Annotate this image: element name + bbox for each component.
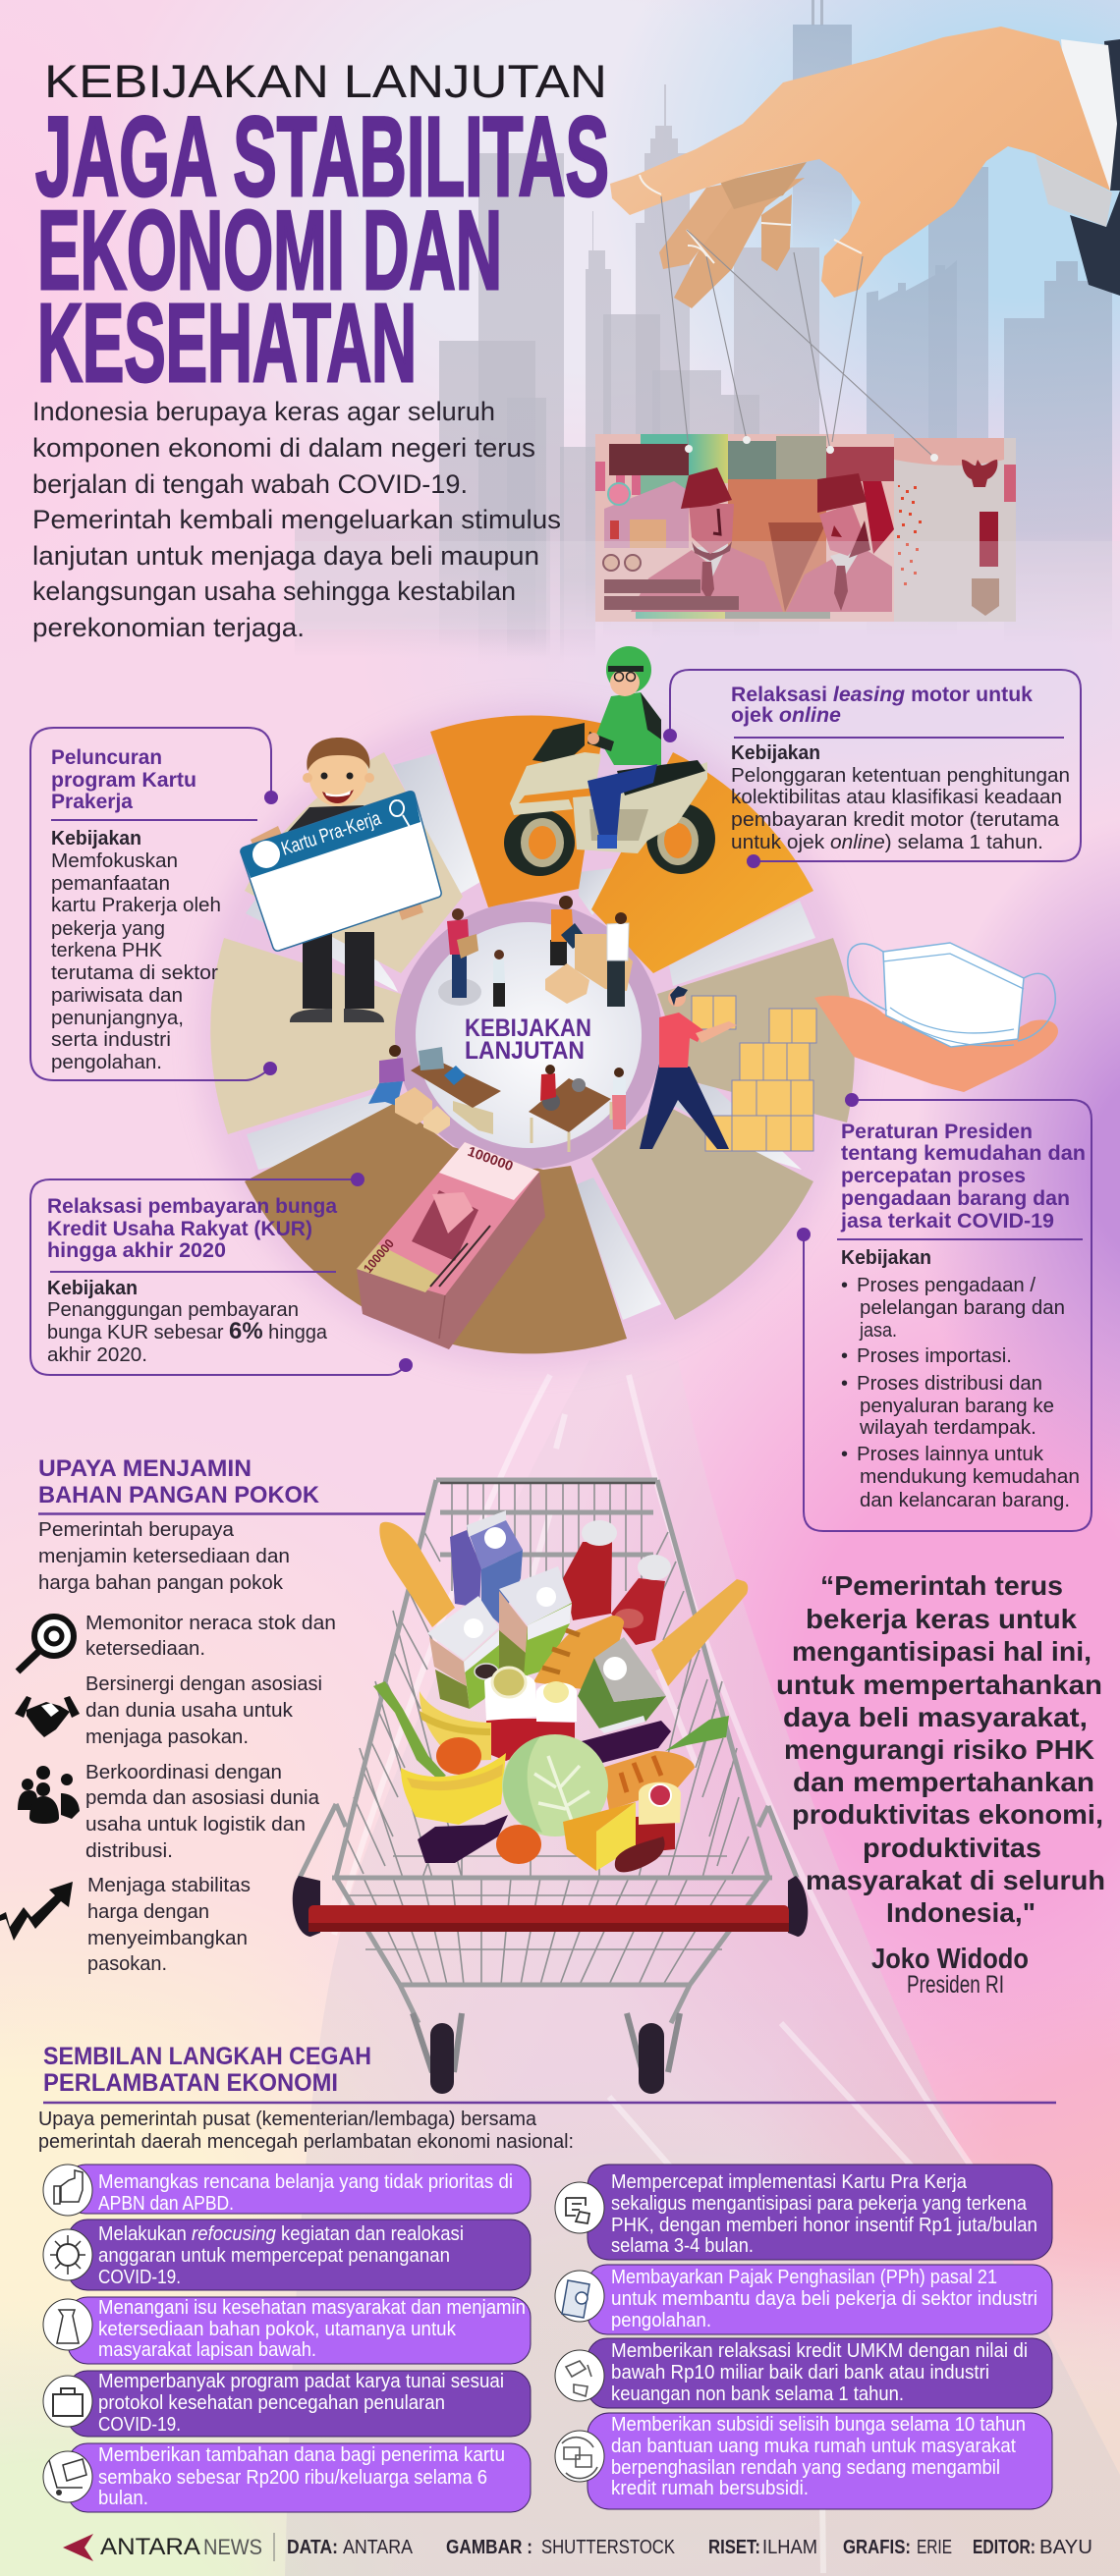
eggplant right <box>582 1721 671 1763</box>
callout: Kartu Prakerja: terkena PHK <box>51 940 163 961</box>
center label: KEBIJAKAN <box>465 1014 591 1042</box>
credits: RISET: <box>708 2537 760 2558</box>
cheese <box>563 1802 636 1871</box>
callout: leasing motor: Relaksasi leasing motor untuk <box>731 684 1033 706</box>
callout: Peraturan Presiden: Proses distribusi dan <box>857 1373 1042 1395</box>
callout: leasing motor: kolektibilitas atau klasifikasi keadaan <box>731 787 1062 808</box>
heading: UPAYA MENJAMIN <box>38 1455 252 1482</box>
credits: GRAFIS: <box>843 2537 911 2558</box>
front shield <box>510 752 601 815</box>
intro paragraph <box>32 397 561 642</box>
step 6 <box>555 2165 1052 2260</box>
baguette right <box>651 1579 748 1686</box>
intro text: harga bahan pangan pokok <box>38 1572 284 1594</box>
callout: KUR: hingga akhir 2020 <box>47 1239 226 1262</box>
heading: SEMBILAN LANGKAH CEGAH <box>43 2043 371 2070</box>
body and cowl <box>573 762 707 853</box>
intro paragraph: perekonomian terjaga. <box>32 613 305 642</box>
callout: Kartu Prakerja: pekerja yang <box>51 918 165 940</box>
callout: KUR <box>30 1173 413 1375</box>
callout: Kartu Prakerja: penunjangnya, <box>51 1008 184 1029</box>
rider legs <box>588 764 657 837</box>
wedge: man <box>245 752 463 973</box>
rings <box>640 175 862 263</box>
heading <box>43 2043 371 2097</box>
section: bahan pangan pokok <box>0 1455 425 1975</box>
item: asosiasi <box>85 1673 322 1748</box>
ketchup bottles <box>563 1542 612 1620</box>
step 7 <box>555 2265 1052 2334</box>
center label <box>465 1014 591 1065</box>
front wheel <box>504 809 575 876</box>
step 9: berpenghasilan rendah yang sedang mengambil <box>611 2457 1000 2479</box>
step 8: bawah Rp10 miliar baik dari bank atau industri <box>611 2362 989 2384</box>
step 7: Membayarkan Pajak Penghasilan (PPh) pasal 21 <box>611 2267 997 2288</box>
step 9: dan bantuan uang muka rumah untuk masyarakat <box>611 2436 1016 2457</box>
step 7: untuk membantu daya beli pekerja di sektor industri <box>611 2288 1037 2310</box>
helmet <box>606 646 651 693</box>
note value top: 100000 <box>466 1143 516 1174</box>
wedge: orange left <box>430 715 604 907</box>
callout: Kartu Prakerja: pariwisata dan <box>51 985 183 1007</box>
quote: daya beli masyarakat, <box>783 1702 1088 1732</box>
quote: produktivitas <box>863 1833 1041 1863</box>
quote: “Pemerintah terus <box>820 1570 1063 1601</box>
step 8: keuangan non bank selama 1 tahun. <box>611 2384 904 2405</box>
step 9 <box>555 2413 1052 2509</box>
item: stabilitas: Menjaga stabilitas <box>87 1875 251 1896</box>
callout: Kartu Prakerja: Prakerja <box>51 791 133 813</box>
callout: Peraturan Presiden: • <box>841 1444 848 1465</box>
step 2 <box>43 2220 531 2290</box>
callout: KUR: Penanggungan pembayaran <box>47 1299 299 1321</box>
callout: Kartu Prakerja: Kebijakan <box>51 828 141 850</box>
wedge: left <box>210 938 401 1134</box>
callout: Peraturan Presiden: • <box>841 1373 848 1395</box>
section: sembilan langkah <box>38 2043 1056 2512</box>
intro text <box>38 2109 574 2153</box>
tomato lower <box>496 1825 541 1864</box>
step 6: PHK, dengan memberi honor insentif Rp1 juta/bulan <box>611 2215 1037 2236</box>
callout: Kartu Prakerja: kartu Prakerja oleh <box>51 895 221 916</box>
card header <box>241 792 420 878</box>
item: asosiasi: menjaga pasokan. <box>85 1726 249 1748</box>
title: EKONOMI DAN <box>37 189 502 313</box>
credits: GAMBAR : <box>446 2537 532 2558</box>
callout: leasing motor: pembayaran kredit motor (terutama <box>731 809 1060 831</box>
callout: Peraturan Presiden: dan kelancaran barang. <box>860 1490 1070 1511</box>
suit sleeve <box>1070 39 1120 296</box>
quote: produktivitas ekonomi, <box>792 1799 1103 1830</box>
quote: Indonesia," <box>886 1897 1036 1928</box>
quote: masyarakat di seluruh <box>806 1865 1105 1895</box>
intro paragraph: berjalan di tengah wabah COVID-19. <box>32 469 468 499</box>
icon: magnifier <box>18 1617 74 1672</box>
credits: SHUTTERSTOCK <box>541 2537 676 2558</box>
card label: Kartu Pra-Kerja <box>279 807 384 860</box>
cart wheels <box>413 2013 680 2094</box>
carton left <box>429 1637 467 1686</box>
step 1: Memangkas rencana belanja yang tidak prioritas di <box>98 2171 513 2193</box>
step 6: sekaligus mengantisipasi para pekerja yang terkena <box>611 2193 1028 2215</box>
step 4: protokol kesehatan pencegahan penularan <box>98 2392 445 2414</box>
heading <box>38 1455 320 1508</box>
item: stabilitas <box>87 1875 251 1975</box>
banknote <box>295 434 1120 630</box>
step 4 <box>43 2371 531 2437</box>
callout: KUR: akhir 2020. <box>47 1344 147 1366</box>
policy wheel <box>197 704 862 1368</box>
callout: Peraturan Presiden: • <box>841 1345 848 1367</box>
step 4: COVID-19. <box>98 2414 181 2436</box>
shopping cart <box>293 1480 808 2094</box>
center scene: people and boxes <box>368 896 633 1152</box>
center ring <box>395 902 662 1169</box>
item: koordinasi: distribusi. <box>85 1840 173 1862</box>
step 5 <box>43 2443 531 2512</box>
hand <box>610 27 1110 298</box>
quote: Joko Widodo <box>871 1944 1029 1975</box>
logo: NEWS <box>203 2535 262 2559</box>
green box <box>578 1658 666 1728</box>
callout: KUR: Kebijakan <box>47 1278 138 1299</box>
intro paragraph: komponen ekonomi di dalam negeri terus <box>32 433 535 463</box>
callout: Peraturan Presiden: Proses lainnya untuk <box>857 1444 1044 1465</box>
intro paragraph: kelangsungan usaha sehingga kestabilan <box>32 576 516 606</box>
intro text: Pemerintah berupaya <box>38 1519 235 1541</box>
callout: Peraturan Presiden: Peraturan Presiden <box>841 1121 1033 1143</box>
bread centre <box>533 1616 624 1689</box>
eggplant left <box>418 1815 508 1863</box>
callout: Peraturan Presiden: penyaluran barang ke <box>860 1396 1054 1417</box>
step 8: Memberikan relaksasi kredit UMKM dengan nilai di <box>611 2340 1028 2362</box>
callout: KUR: Kredit Usaha Rakyat (KUR) <box>47 1218 312 1240</box>
item: koordinasi <box>85 1762 320 1862</box>
road <box>285 1360 1120 2576</box>
quote: Presiden RI <box>907 1971 1004 1999</box>
rear wheel <box>646 803 715 874</box>
credits <box>287 2537 1092 2558</box>
callout: leasing motor: Pelonggaran ketentuan penghitungan <box>731 765 1070 787</box>
step 8 <box>555 2338 1052 2408</box>
icon: handshake <box>15 1696 80 1737</box>
tomato top <box>436 1737 481 1775</box>
intro paragraph: lanjutan untuk menjaga daya beli maupun <box>32 541 539 571</box>
title <box>35 55 609 405</box>
callout: Kartu Prakerja: pengolahan. <box>51 1052 162 1073</box>
callout: Kartu Prakerja: terutama di sektor <box>51 962 218 984</box>
step 2: COVID-19. <box>98 2267 181 2288</box>
callout: Peraturan Presiden: percepatan proses <box>841 1165 1026 1187</box>
back fingers <box>761 194 792 271</box>
credits: DATA: <box>287 2537 338 2558</box>
windshield <box>532 723 585 765</box>
hand with strings <box>610 27 1120 462</box>
seat <box>617 760 705 795</box>
callout: Peraturan Presiden: pengadaan barang dan <box>841 1187 1070 1210</box>
callout: Peraturan Presiden: Proses importasi. <box>857 1345 1012 1367</box>
cart wires <box>300 1480 797 2023</box>
step 3: masyarakat lapisan bawah. <box>98 2339 316 2361</box>
callout: leasing motor: Kebijakan <box>731 742 820 764</box>
illustration: hand with face mask <box>814 943 1058 1092</box>
icon: people group <box>18 1766 80 1824</box>
sausage <box>615 1836 665 1872</box>
cart handle <box>293 1876 808 1937</box>
step 3: ketersediaan bahan pokok, utamanya untuk <box>98 2319 457 2340</box>
intro text <box>38 1519 290 1594</box>
callout: Kartu Prakerja: Peluncuran <box>51 746 162 769</box>
callout: Kartu Prakerja: pemanfaatan <box>51 873 170 895</box>
can right <box>636 1815 675 1853</box>
center label: LANJUTAN <box>465 1037 585 1065</box>
baguette left <box>379 1522 455 1627</box>
step 1 <box>43 2165 531 2216</box>
credits: EDITOR: <box>973 2537 1036 2558</box>
callout: Peraturan Presiden: jasa terkait COVID-19 <box>840 1210 1054 1233</box>
callout: Kartu Prakerja: serta industri <box>51 1029 171 1051</box>
intro text: pemerintah daerah mencegah perlambatan ekonomi nasional: <box>38 2131 574 2153</box>
quote: untuk mempertahankan <box>776 1670 1102 1700</box>
credits: ANTARA <box>343 2537 414 2558</box>
step 9: kredit rumah bersubsidi. <box>611 2478 809 2499</box>
leek right <box>665 1716 729 1751</box>
quote: dan mempertahankan <box>793 1767 1094 1797</box>
bananas lower <box>401 1753 506 1825</box>
carton mid <box>499 1627 528 1676</box>
quote: mengantisipasi hal ini, <box>792 1636 1092 1667</box>
step 2: anggaran untuk mempercepat penanganan <box>98 2245 450 2267</box>
step 6: selama 3-4 bulan. <box>611 2235 754 2257</box>
item: stabilitas: pasokan. <box>87 1953 167 1975</box>
title: KEBIJAKAN LANJUTAN <box>44 55 607 107</box>
callout: Peraturan Presiden <box>797 1093 1092 1531</box>
item: koordinasi: Berkoordinasi dengan <box>85 1762 282 1783</box>
wedge: brown <box>245 1103 627 1353</box>
callout: Kartu Prakerja <box>30 728 278 1080</box>
step 4: Memperbanyak program padat karya tunai sesuai <box>98 2371 504 2392</box>
logo <box>63 2534 262 2561</box>
item: asosiasi: Bersinergi dengan asosiasi <box>85 1673 322 1695</box>
logo: ANTARA <box>100 2534 200 2560</box>
callout: Peraturan Presiden: Proses pengadaan / <box>857 1275 1036 1296</box>
note value side: 100000 <box>361 1236 397 1276</box>
callout: Peraturan Presiden: mendukung kemudahan <box>860 1466 1080 1488</box>
intro text: Upaya pemerintah pusat (kementerian/lembaga) bersama <box>38 2109 537 2130</box>
callout: Peraturan Presiden: jasa. <box>859 1320 897 1342</box>
item: stok: ketersediaan. <box>85 1638 205 1660</box>
wedge: orange right <box>591 752 813 973</box>
step 3 <box>43 2297 531 2364</box>
step 2: Melakukan refocusing kegiatan dan realokasi <box>98 2223 464 2245</box>
item: stok <box>85 1613 336 1660</box>
quote: mengurangi risiko PHK <box>784 1734 1094 1765</box>
quote <box>776 1570 1105 1999</box>
grey cuff <box>1036 155 1112 227</box>
credits: BAYU <box>1039 2537 1092 2558</box>
illustration: money stack <box>357 1142 545 1349</box>
bread right <box>602 1751 695 1810</box>
illustration: delivery man and boxes <box>640 986 816 1151</box>
title: JAGA STABILITAS <box>35 94 609 220</box>
step 5: bulan. <box>98 2488 148 2509</box>
wedge: taupe lower <box>591 1103 813 1320</box>
quote: bekerja keras untuk <box>806 1604 1077 1634</box>
intro paragraph: Indonesia berupaya keras agar seluruh <box>32 397 495 426</box>
cans <box>486 1719 537 1761</box>
intro text: menjamin ketersediaan dan <box>38 1546 290 1567</box>
strings <box>661 196 934 458</box>
callout: Kartu Prakerja: Memfokuskan <box>51 850 178 872</box>
callout: Peraturan Presiden: pelelangan barang dan <box>860 1297 1065 1319</box>
step 5: sembako sebesar Rp200 ribu/keluarga selama 6 <box>98 2467 487 2489</box>
step 9: Memberikan subsidi selisih bunga selama 10 tahun <box>611 2414 1026 2436</box>
step 7: pengolahan. <box>611 2310 711 2331</box>
heading: BAHAN PANGAN POKOK <box>38 1482 320 1508</box>
credits: ERIE <box>917 2537 952 2558</box>
illustration: motorcycle rider <box>504 646 715 876</box>
item: stabilitas: menyeimbangkan <box>87 1928 248 1949</box>
item: stok: Memonitor neraca stok dan <box>85 1613 336 1634</box>
callout: leasing motor: ojek online <box>731 704 841 727</box>
callout: Peraturan Presiden: tentang kemudahan dan <box>841 1142 1086 1165</box>
cabbage <box>502 1734 608 1836</box>
title: KESEHATAN <box>37 281 417 405</box>
rider jacket <box>596 692 661 765</box>
wedge: taupe upper <box>657 938 855 1123</box>
wheel folds <box>246 753 815 1320</box>
callout: Kartu Prakerja: program Kartu <box>51 769 196 792</box>
bananas top <box>420 1691 491 1761</box>
step 5: Memberikan tambahan dana bagi penerima kartu <box>98 2444 505 2466</box>
city skyline <box>295 0 1112 664</box>
step 6: Mempercepat implementasi Kartu Pra Kerja <box>611 2171 968 2193</box>
item: koordinasi: usaha untuk logistik dan <box>85 1814 306 1836</box>
white cuff <box>1061 39 1117 191</box>
item: asosiasi: dan dunia usaha untuk <box>85 1700 294 1722</box>
hand on grip <box>588 732 614 751</box>
groceries <box>373 1510 748 1872</box>
footer <box>63 2533 1092 2561</box>
item: koordinasi: pemda dan asosiasi dunia <box>85 1787 320 1809</box>
callout: leasing motor: untuk ojek online) selama 1 tahun. <box>731 832 1043 853</box>
callout: KUR: Relaksasi pembayaran bunga <box>47 1195 337 1218</box>
callout: Peraturan Presiden: wilayah terdampak. <box>859 1417 1036 1439</box>
card <box>241 792 441 951</box>
callout: Peraturan Presiden: Kebijakan <box>841 1247 931 1269</box>
center disk <box>416 922 642 1148</box>
heading: PERLAMBATAN EKONOMI <box>43 2069 338 2097</box>
callout: leasing motor <box>663 670 1081 868</box>
illustration: man holding card <box>241 738 441 1022</box>
leek left <box>373 1681 446 1780</box>
item: stabilitas: harga dengan <box>87 1901 209 1923</box>
step 3: Menangani isu kesehatan masyarakat dan menjamin <box>98 2297 526 2319</box>
callout: Peraturan Presiden: • <box>841 1275 848 1296</box>
callout: KUR: bunga KUR sebesar 6% hingga <box>47 1318 328 1344</box>
intro paragraph: Pemerintah kembali mengeluarkan stimulus <box>32 505 561 534</box>
icon: rising arrow <box>0 1882 73 1941</box>
credits: ILHAM <box>762 2537 817 2558</box>
step 1: APBN dan APBD. <box>98 2193 234 2215</box>
blue carton <box>450 1530 481 1608</box>
